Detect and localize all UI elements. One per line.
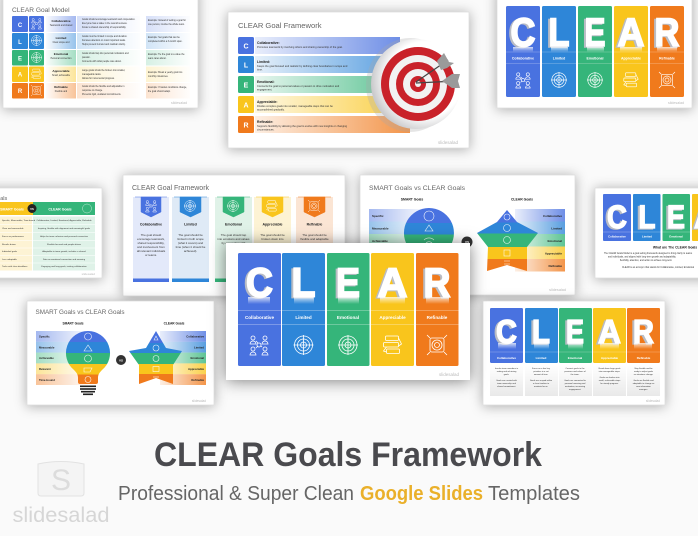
left bands [369, 209, 425, 246]
tile E: E [667, 199, 685, 235]
card Limited: (what it covers) and [178, 241, 203, 245]
right bands: Emotional [547, 239, 562, 243]
right bands: Limited [194, 345, 204, 349]
row L: Focuses attention on most important tasks. [82, 39, 126, 42]
VS badge: VS [119, 358, 123, 362]
row R: Example: If market conditions change, [148, 86, 187, 89]
description: and individuals, and aligned with long-term growth and adaptability. [608, 256, 677, 258]
column R: emerges. [639, 388, 648, 391]
footer mark: slidesalad [438, 140, 458, 145]
logo: slidesalad [12, 462, 110, 527]
band R: Refinable: [257, 120, 273, 124]
column A: A [618, 11, 644, 55]
row A: Small, achievable [52, 75, 71, 77]
column E: personal meaning and [565, 382, 586, 385]
row R: the goal should adapt. [148, 90, 171, 93]
column E: E [336, 260, 360, 306]
slide title: CLEAR Goal Model [12, 7, 70, 14]
column A: Appreciable [621, 56, 641, 60]
column L [282, 253, 325, 366]
row E: Example: Tie the goal to a value the [148, 53, 185, 56]
right bands [515, 209, 565, 272]
column C: C [496, 313, 517, 350]
bulb screw base [80, 386, 96, 395]
slide title: SMART Goals vs CLEAR Goals [36, 309, 125, 316]
bulb icons [84, 333, 92, 382]
logo: slidesalad: slidesalad [12, 504, 110, 527]
card Appreciable: The goal should be [260, 233, 285, 237]
slide: SMART Goals vs CLEAR Goals bulb and star [360, 175, 575, 295]
subtitle: Google Slides [360, 483, 483, 505]
table header: CLEAR Goals [48, 208, 72, 212]
row L: L [18, 40, 22, 46]
band A: accomplished gradually. [257, 108, 285, 112]
bulb [404, 208, 454, 243]
row E: passion. [82, 57, 91, 59]
column L: Focus on a few key [532, 368, 551, 370]
column E: the team. [571, 373, 580, 376]
card Emotional: by connecting with [222, 241, 246, 245]
card Limited [172, 197, 209, 282]
band R [238, 116, 410, 133]
column E: Emotional [587, 56, 603, 60]
band A: Appreciable: [257, 100, 278, 104]
column R: Goals are flexible and [633, 379, 654, 382]
column E: Connect goals to the [565, 367, 585, 370]
target with arrows [366, 38, 461, 132]
column C [238, 253, 281, 366]
table header: SMART Goals [0, 208, 24, 212]
table rows: Tasks with clear deadlines [2, 265, 28, 268]
row R [12, 83, 190, 98]
card Collaborative: all relevant individuals [137, 249, 166, 253]
column A [593, 308, 626, 396]
table rows: Focus on performance [2, 235, 25, 238]
CLEAR heading: CLEAR Goals [164, 322, 185, 326]
right bands: Collaborative [186, 334, 204, 338]
tile L [633, 194, 660, 241]
footer mark: slidesalad [668, 101, 684, 105]
band E [238, 76, 400, 93]
column L: L [532, 313, 550, 350]
column L: Limited [553, 56, 565, 60]
description: The CLEAR Goals Model is a goal setting framework designed to bring clarity to teams [604, 252, 693, 255]
column L: maintain focus. [534, 385, 548, 388]
row A: Large goals should be broken into smaller, [82, 69, 126, 72]
column E: engagement. [569, 388, 581, 391]
slide: CLEAR Goal Model [3, 0, 198, 108]
band R: Supports flexibility by allowing the goal to evolve with new insights or changing [257, 124, 348, 128]
table rows: Inspiring, flexible with alignment and meaningful goals [38, 227, 91, 230]
column L: amount of time. [534, 373, 549, 376]
VS badge [462, 236, 472, 248]
column C: team ownership and [497, 382, 517, 385]
left bands: Measurable [39, 345, 55, 349]
card Limited: The goal should be [178, 233, 203, 237]
column A: for steady progress. [600, 382, 619, 385]
column E [327, 253, 370, 366]
row E: Emotional [54, 52, 68, 56]
column E [559, 308, 592, 396]
column R: as situations change. [634, 373, 654, 376]
card Collaborative [133, 197, 169, 282]
row A: A [18, 72, 23, 78]
slide: what are the CLEAR goals [595, 188, 698, 278]
slide: CLEAR letters with icons [497, 0, 692, 108]
column C: Goals are created with [496, 379, 518, 382]
column A: small, achievable steps [599, 379, 620, 382]
column C: setting and achieving [497, 370, 517, 373]
row E: E [18, 56, 22, 62]
card Limited: time (when it should be [176, 245, 206, 249]
column C [490, 308, 523, 396]
card Collaborative: and involvement from [137, 245, 165, 249]
table rows [0, 216, 95, 270]
column A: A [598, 313, 621, 350]
row A: monthly milestones. [148, 75, 169, 78]
main title: CLEAR Goals Framework [154, 436, 542, 474]
card Collaborative: Collaborative [140, 222, 162, 226]
row L: Example: Set goals that can be [148, 36, 181, 39]
card Refinable: Refinable [307, 222, 322, 226]
row R: R [18, 89, 23, 95]
row C: C [18, 23, 23, 29]
table rows: Data on emotional connection and meaning [43, 258, 86, 261]
column C: C [510, 11, 536, 55]
right bands: Appreciable [188, 367, 204, 371]
row E: team cares about. [148, 57, 167, 60]
column R: Refinable [659, 56, 675, 60]
row E: Connects with what people care about. [82, 60, 122, 63]
band E: Emotional: [257, 80, 275, 84]
card Refinable: flexible and adaptable [300, 237, 329, 241]
tile L: Limited [642, 234, 652, 238]
left bands: Measurable [372, 226, 389, 230]
band E: E [244, 82, 249, 90]
SMART heading: SMART Goals [62, 322, 84, 326]
star icons [153, 336, 159, 377]
left bands: Achievable [39, 356, 54, 360]
tile E [662, 194, 690, 241]
row C: one person, involve the whole team. [148, 23, 185, 26]
description: CLEAR is an acronym that stands for Collaborative, Limited, Emotional [622, 266, 694, 269]
VS badge [116, 355, 126, 365]
column C: Collaborative [245, 315, 274, 320]
column L: a clear timeline to [533, 382, 550, 385]
card Collaborative: shared responsibility, [138, 241, 165, 245]
lightbulb [66, 331, 110, 384]
card Limited: limited in both scope [177, 237, 204, 241]
footer mark: slidesalad [82, 272, 95, 276]
tile C [603, 194, 631, 241]
row C: Teamwork and shared [50, 24, 73, 27]
column L: Limited [536, 356, 546, 360]
band E: Connects the goal to personal values or passion to drive motivation and [257, 84, 340, 88]
table rows: Helps for team cohesion and personal connection [40, 235, 89, 238]
card Collaborative: The goal should [141, 233, 162, 237]
row E: Personal connection [51, 57, 72, 60]
row A [12, 66, 190, 82]
column C [506, 6, 540, 97]
slide: SMART vs CLEAR table [0, 188, 102, 278]
row C: Example: Instead of setting a goal for [148, 19, 186, 22]
table rows: Specific, Measurable, Time-bound [2, 219, 36, 222]
table rows: Collaborative, Limited, Emotional, Appreciable, Refinable [36, 219, 92, 222]
subtitle: Templates [488, 483, 580, 505]
footer mark: slidesalad [171, 101, 187, 105]
column C: C [246, 260, 273, 306]
column A: into manageable steps. [599, 370, 621, 373]
column A: Goals are broken into [600, 376, 620, 379]
card Appreciable: broken down into [261, 237, 284, 241]
column E [578, 6, 612, 97]
subtitle: Professional & Super Clean [118, 483, 354, 505]
table rows: Clear and measurable [2, 227, 24, 230]
band L: L [244, 62, 249, 70]
row R: response to change. [82, 89, 103, 92]
column R: R [654, 11, 680, 55]
left bands: Specific [39, 334, 50, 338]
row E [12, 50, 190, 66]
row A: Appreciable [52, 69, 70, 73]
right bands: Limited [551, 226, 562, 230]
column A: A [378, 260, 408, 306]
row R: Prevents rigid, outdated commitments. [82, 93, 122, 96]
tile L: L [638, 199, 656, 235]
column R: R [633, 313, 654, 350]
VS badge: VS [465, 240, 469, 244]
row C: Everyone has a stake in the overall success. [82, 22, 128, 25]
column E: Emotional [568, 356, 582, 360]
column L: Limited [295, 315, 312, 320]
column R: new information [636, 385, 652, 388]
table rows: Engaging and long-goals, inviting collaboration [41, 265, 87, 268]
slide title: CLEAR Goal Framework [132, 185, 210, 192]
card Collaborative: encourage teamwork, [137, 237, 165, 241]
column L [525, 308, 558, 396]
column R: Refinable [427, 315, 448, 320]
band E: engagement. [257, 88, 272, 92]
column R: R [424, 260, 450, 306]
column R [416, 253, 458, 366]
right bands: Refinable [548, 264, 562, 268]
column E: E [566, 313, 584, 350]
footer mark: slidesalad [192, 399, 206, 403]
band A: Divides complex goals into smaller, manageable steps that can be [257, 104, 333, 108]
band C: Collaborative: [257, 41, 280, 45]
column R: adaptable to change as [633, 382, 654, 385]
table rows: Individual goals [2, 251, 18, 253]
logo: slidesalad: S [51, 464, 71, 497]
row E: Goals should tap into personal motivation and [82, 52, 129, 55]
row L: completed within a 3-month span. [148, 40, 183, 43]
CLEAR heading: CLEAR Goals [511, 198, 533, 202]
band R: R [243, 122, 249, 130]
row L: Clear scope and [53, 41, 70, 44]
row A: Allows for incremental progress. [82, 77, 115, 80]
column C: Collaborative [512, 56, 534, 60]
table header: VS [30, 207, 34, 211]
bulb icons [424, 211, 434, 243]
column E: Emotional [337, 315, 359, 320]
table header [0, 202, 95, 215]
SMART heading: SMART Goals [401, 198, 423, 202]
row R: Goals should be flexible and adjustable in [82, 85, 125, 88]
column A: Appreciable [379, 315, 406, 320]
card Emotional: into emotions and values [218, 237, 250, 241]
band C: C [243, 44, 249, 50]
row R: Refinable [54, 85, 68, 89]
left bands: Relevant [39, 367, 51, 371]
column R: Stay flexible and be [634, 367, 653, 370]
card Refinable [296, 197, 333, 282]
slide title: CLEAR Goal Framework [238, 21, 322, 30]
row L: Helps prevent burnout and maintain clarity. [82, 43, 126, 46]
column R: Refinable [637, 356, 651, 360]
right bands: Refinable [191, 378, 204, 382]
slide: CLEAR letters with descriptions [483, 301, 665, 405]
band L [238, 56, 400, 73]
description: flexibility, attention, and action to achieve long-term [620, 259, 672, 262]
band L: Keeps the goal focused and realistic by defining clear boundaries in scope and [257, 64, 348, 68]
column C: Involve team members in [495, 367, 519, 370]
column E: E [584, 11, 606, 55]
card Emotional [215, 197, 252, 282]
right bands: Collaborative [543, 214, 562, 218]
row R: Flexible and [55, 91, 68, 93]
card Limited: Limited [184, 222, 197, 226]
left bands [36, 331, 88, 385]
subtitle [118, 483, 580, 505]
slide title: SMART Goals vs CLEAR Goals [369, 185, 466, 192]
footer mark: slidesalad [549, 288, 566, 292]
description: What are The CLEAR Goals [653, 246, 697, 250]
column A [371, 253, 414, 366]
row C: Goals should encourage teamwork and cooperation. [82, 18, 136, 21]
column L: L [292, 260, 316, 306]
card Limited: achieved). [184, 249, 197, 253]
tile C: C [607, 199, 627, 235]
row L: Goals must be limited in scope and duration. [82, 35, 128, 38]
slide: CLEAR Goal Framework ribbons [123, 175, 345, 296]
table rows: Results driven [2, 243, 17, 246]
table rows: Adaptable to team growth, includes a shared [42, 250, 86, 253]
card Refinable: The goal should be [302, 233, 327, 237]
row C: Foster a shared ownership of responsibility. [82, 26, 127, 29]
band C [238, 37, 400, 54]
row C [12, 16, 190, 32]
card Appreciable: Appreciable [262, 222, 283, 226]
column L: priorities in a set [533, 370, 549, 373]
right bands: Appreciable [545, 252, 562, 256]
column E: Goals are connected to [564, 379, 587, 382]
star [129, 331, 182, 384]
column C: goals. [504, 374, 510, 376]
column A: Appreciable [601, 356, 618, 360]
band L: time. [257, 68, 263, 72]
star [477, 210, 538, 271]
column C: Collaborative [497, 356, 516, 360]
row L [12, 33, 190, 49]
column L [542, 6, 576, 97]
left bands: Achievable [372, 239, 388, 243]
band A [238, 96, 400, 113]
left bands: Specific [372, 214, 384, 218]
right bands: Emotional [190, 356, 204, 360]
table rows: Flexible-focused and people-driven [47, 243, 82, 246]
tile E: Emotional [669, 234, 683, 238]
right bands [160, 331, 206, 385]
row C: Collaborative [51, 19, 71, 23]
band A: A [243, 102, 249, 110]
column A: Break down large goals [599, 367, 620, 370]
footer mark: slidesalad [439, 372, 459, 377]
tile A [692, 194, 698, 241]
left bands: Time-bound [39, 378, 55, 382]
row L: Limited [56, 36, 66, 40]
column A [614, 6, 648, 97]
column L: L [548, 11, 570, 55]
slide: SMART Goals vs CLEAR Goals front left [27, 301, 214, 405]
footer mark: slidesalad [646, 399, 660, 403]
card Appreciable [254, 197, 291, 282]
star icons [504, 214, 510, 264]
band C: Promotes teamwork by involving others and sharing ownership of the goal. [257, 45, 343, 49]
tile C: Collaborative [608, 234, 626, 238]
column R [650, 6, 684, 97]
slide: CLEAR Goal Framework with target [228, 12, 469, 148]
card Emotional: Emotional [225, 222, 242, 226]
table rows: Less adaptable [2, 258, 18, 261]
column R [627, 308, 660, 396]
column C: shared commitment. [497, 385, 516, 388]
row A: manageable tasks. [82, 73, 102, 76]
slide: main CLEAR letters front [226, 243, 470, 380]
row A: Example: Break a yearly goal into [148, 71, 183, 74]
card Emotional: The goal should tap [221, 233, 247, 237]
column L: Goals are scoped within [530, 379, 553, 382]
band R: circumstances. [257, 128, 275, 132]
card Collaborative: or teams. [145, 253, 157, 257]
column E: motivation, increasing [565, 385, 586, 388]
column E: passions and values of [564, 371, 586, 373]
band L: Limited: [257, 60, 270, 64]
column R: ready to adjust goals [634, 370, 653, 373]
description [604, 246, 697, 269]
